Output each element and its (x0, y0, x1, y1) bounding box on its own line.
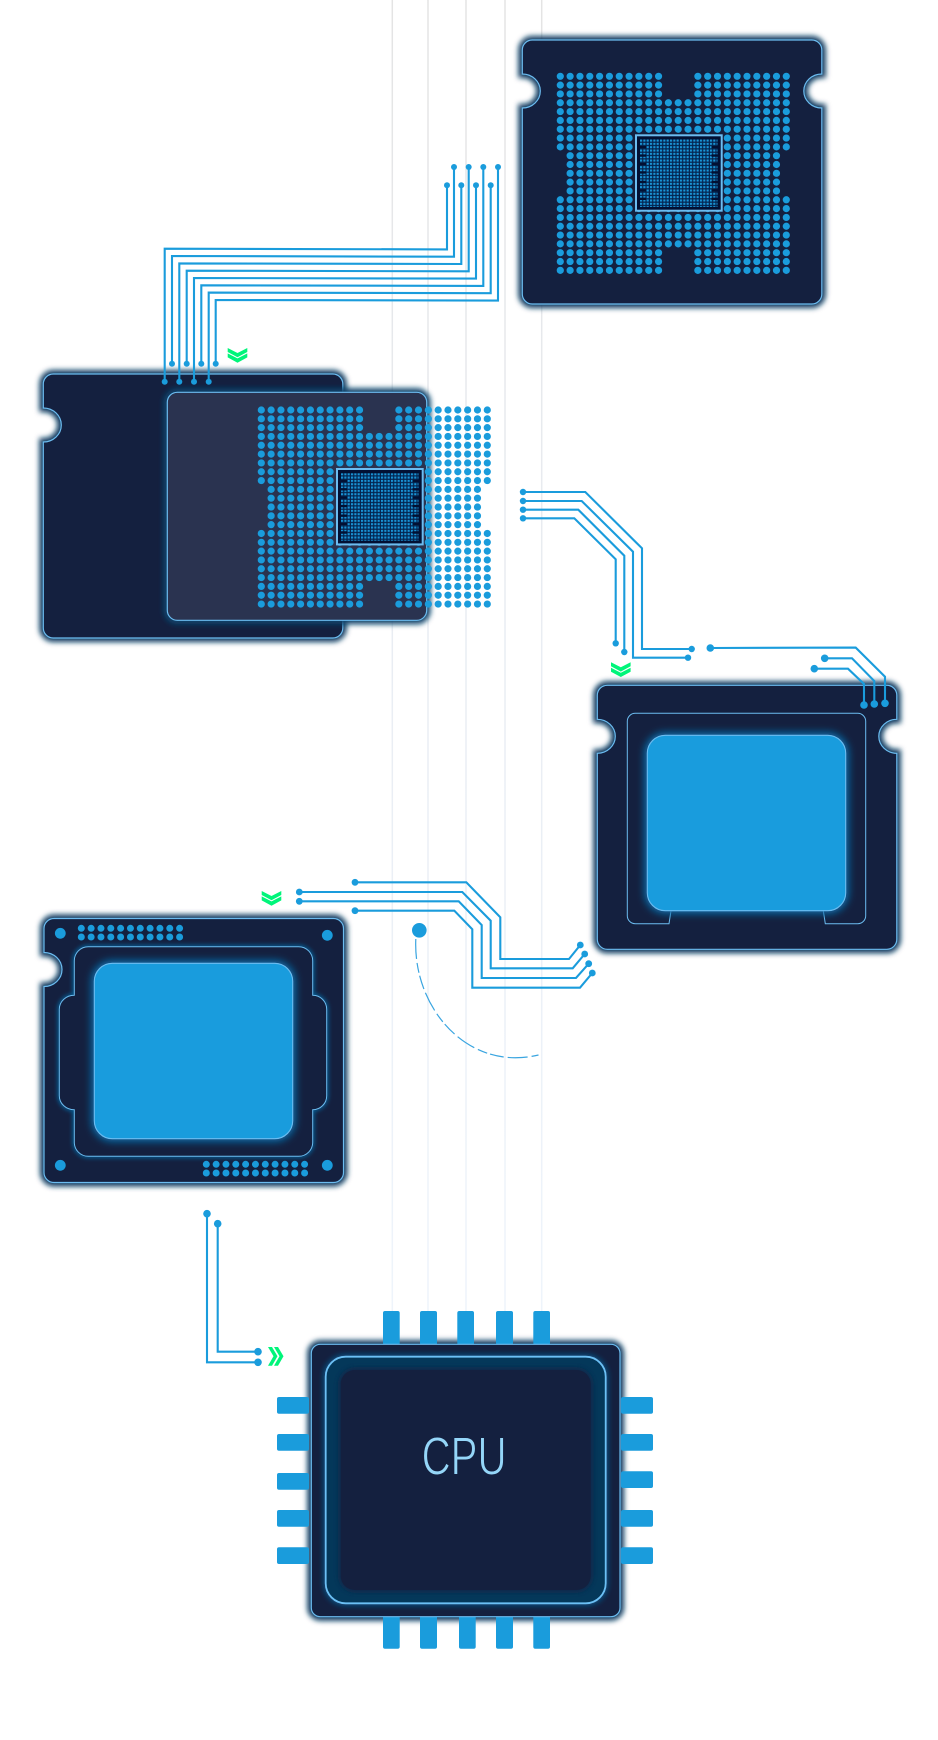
circuit traces: chip 2 to chip 3 (520, 489, 695, 661)
blue die (647, 735, 846, 911)
circuit traces: chip 1 to chip 2 (162, 164, 501, 385)
chip 1: pin-grid underside (522, 40, 822, 304)
top pins (383, 1311, 550, 1345)
chip 2: socket with pin grid insert (43, 374, 487, 638)
circuit traces: chip 3 top-right (706, 644, 889, 709)
blue die (94, 963, 293, 1139)
arrow: green chevron to chip 2 (228, 348, 247, 363)
CPU inner frame (326, 1357, 606, 1603)
CPU chip (277, 1311, 653, 1649)
arrow: green chevron to CPU (268, 1347, 284, 1366)
left pins (277, 1397, 309, 1564)
vertical guide lines (392, 0, 542, 1312)
bottom pins (383, 1615, 550, 1649)
CPU label: CPU (422, 1426, 507, 1486)
CPU body (311, 1344, 620, 1617)
contact rows (81, 928, 305, 1173)
circuit traces: chip 3 to chip 4 (296, 879, 596, 988)
dashed arc with large node (412, 923, 538, 1058)
arrow: green chevron to chip 4 (262, 891, 281, 906)
chip 3: heat spreader with notches (597, 685, 897, 949)
right pins (621, 1397, 653, 1564)
insert plate (167, 392, 427, 620)
chip 4: top view with contact rows (44, 918, 344, 1182)
pin grid overlapping plate (261, 410, 487, 604)
inner frame (59, 947, 327, 1156)
corner contacts (55, 928, 333, 1171)
inner frame (627, 713, 866, 924)
circuit traces: chip 4 to CPU (203, 1210, 262, 1366)
arrow: green chevron to chip 3 (611, 662, 631, 677)
